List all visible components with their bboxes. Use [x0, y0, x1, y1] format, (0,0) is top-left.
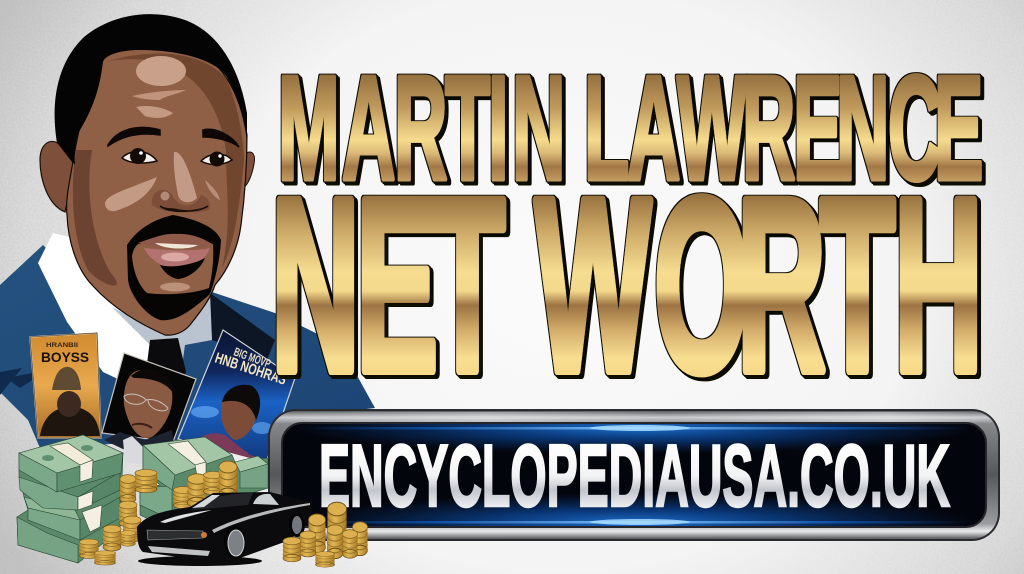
poster: Bad Boys: HRANBII — [46, 343, 78, 349]
illustration: left ear — [40, 142, 75, 212]
website banner — [268, 409, 1000, 541]
coins: central and lower-left piles — [80, 461, 237, 565]
illustration: goatee and mouth — [127, 215, 221, 320]
title: MARTIN LAWRENCE: MARTIN LAWRENCE — [278, 45, 983, 211]
money stacks: left pile — [17, 435, 123, 563]
poster: portrait with glasses — [102, 353, 196, 470]
illustration: face — [67, 37, 247, 335]
title: NET WORTH: NET WORTH — [271, 149, 983, 423]
illustration: hair — [55, 14, 247, 165]
money stacks: right pile — [140, 437, 268, 530]
illustration: suit jacket — [0, 233, 375, 448]
poster: blue movie: HNB NOHRAS — [213, 350, 288, 389]
poster: blue movie: BIG MOVP — [232, 345, 272, 371]
poster: Bad Boys — [30, 333, 101, 438]
poster: Bad Boys: BOYSS — [41, 349, 89, 365]
black car — [137, 492, 312, 566]
poster: blue movie — [178, 330, 295, 462]
coins: right pile — [283, 502, 368, 567]
illustration: right ear — [243, 152, 255, 188]
